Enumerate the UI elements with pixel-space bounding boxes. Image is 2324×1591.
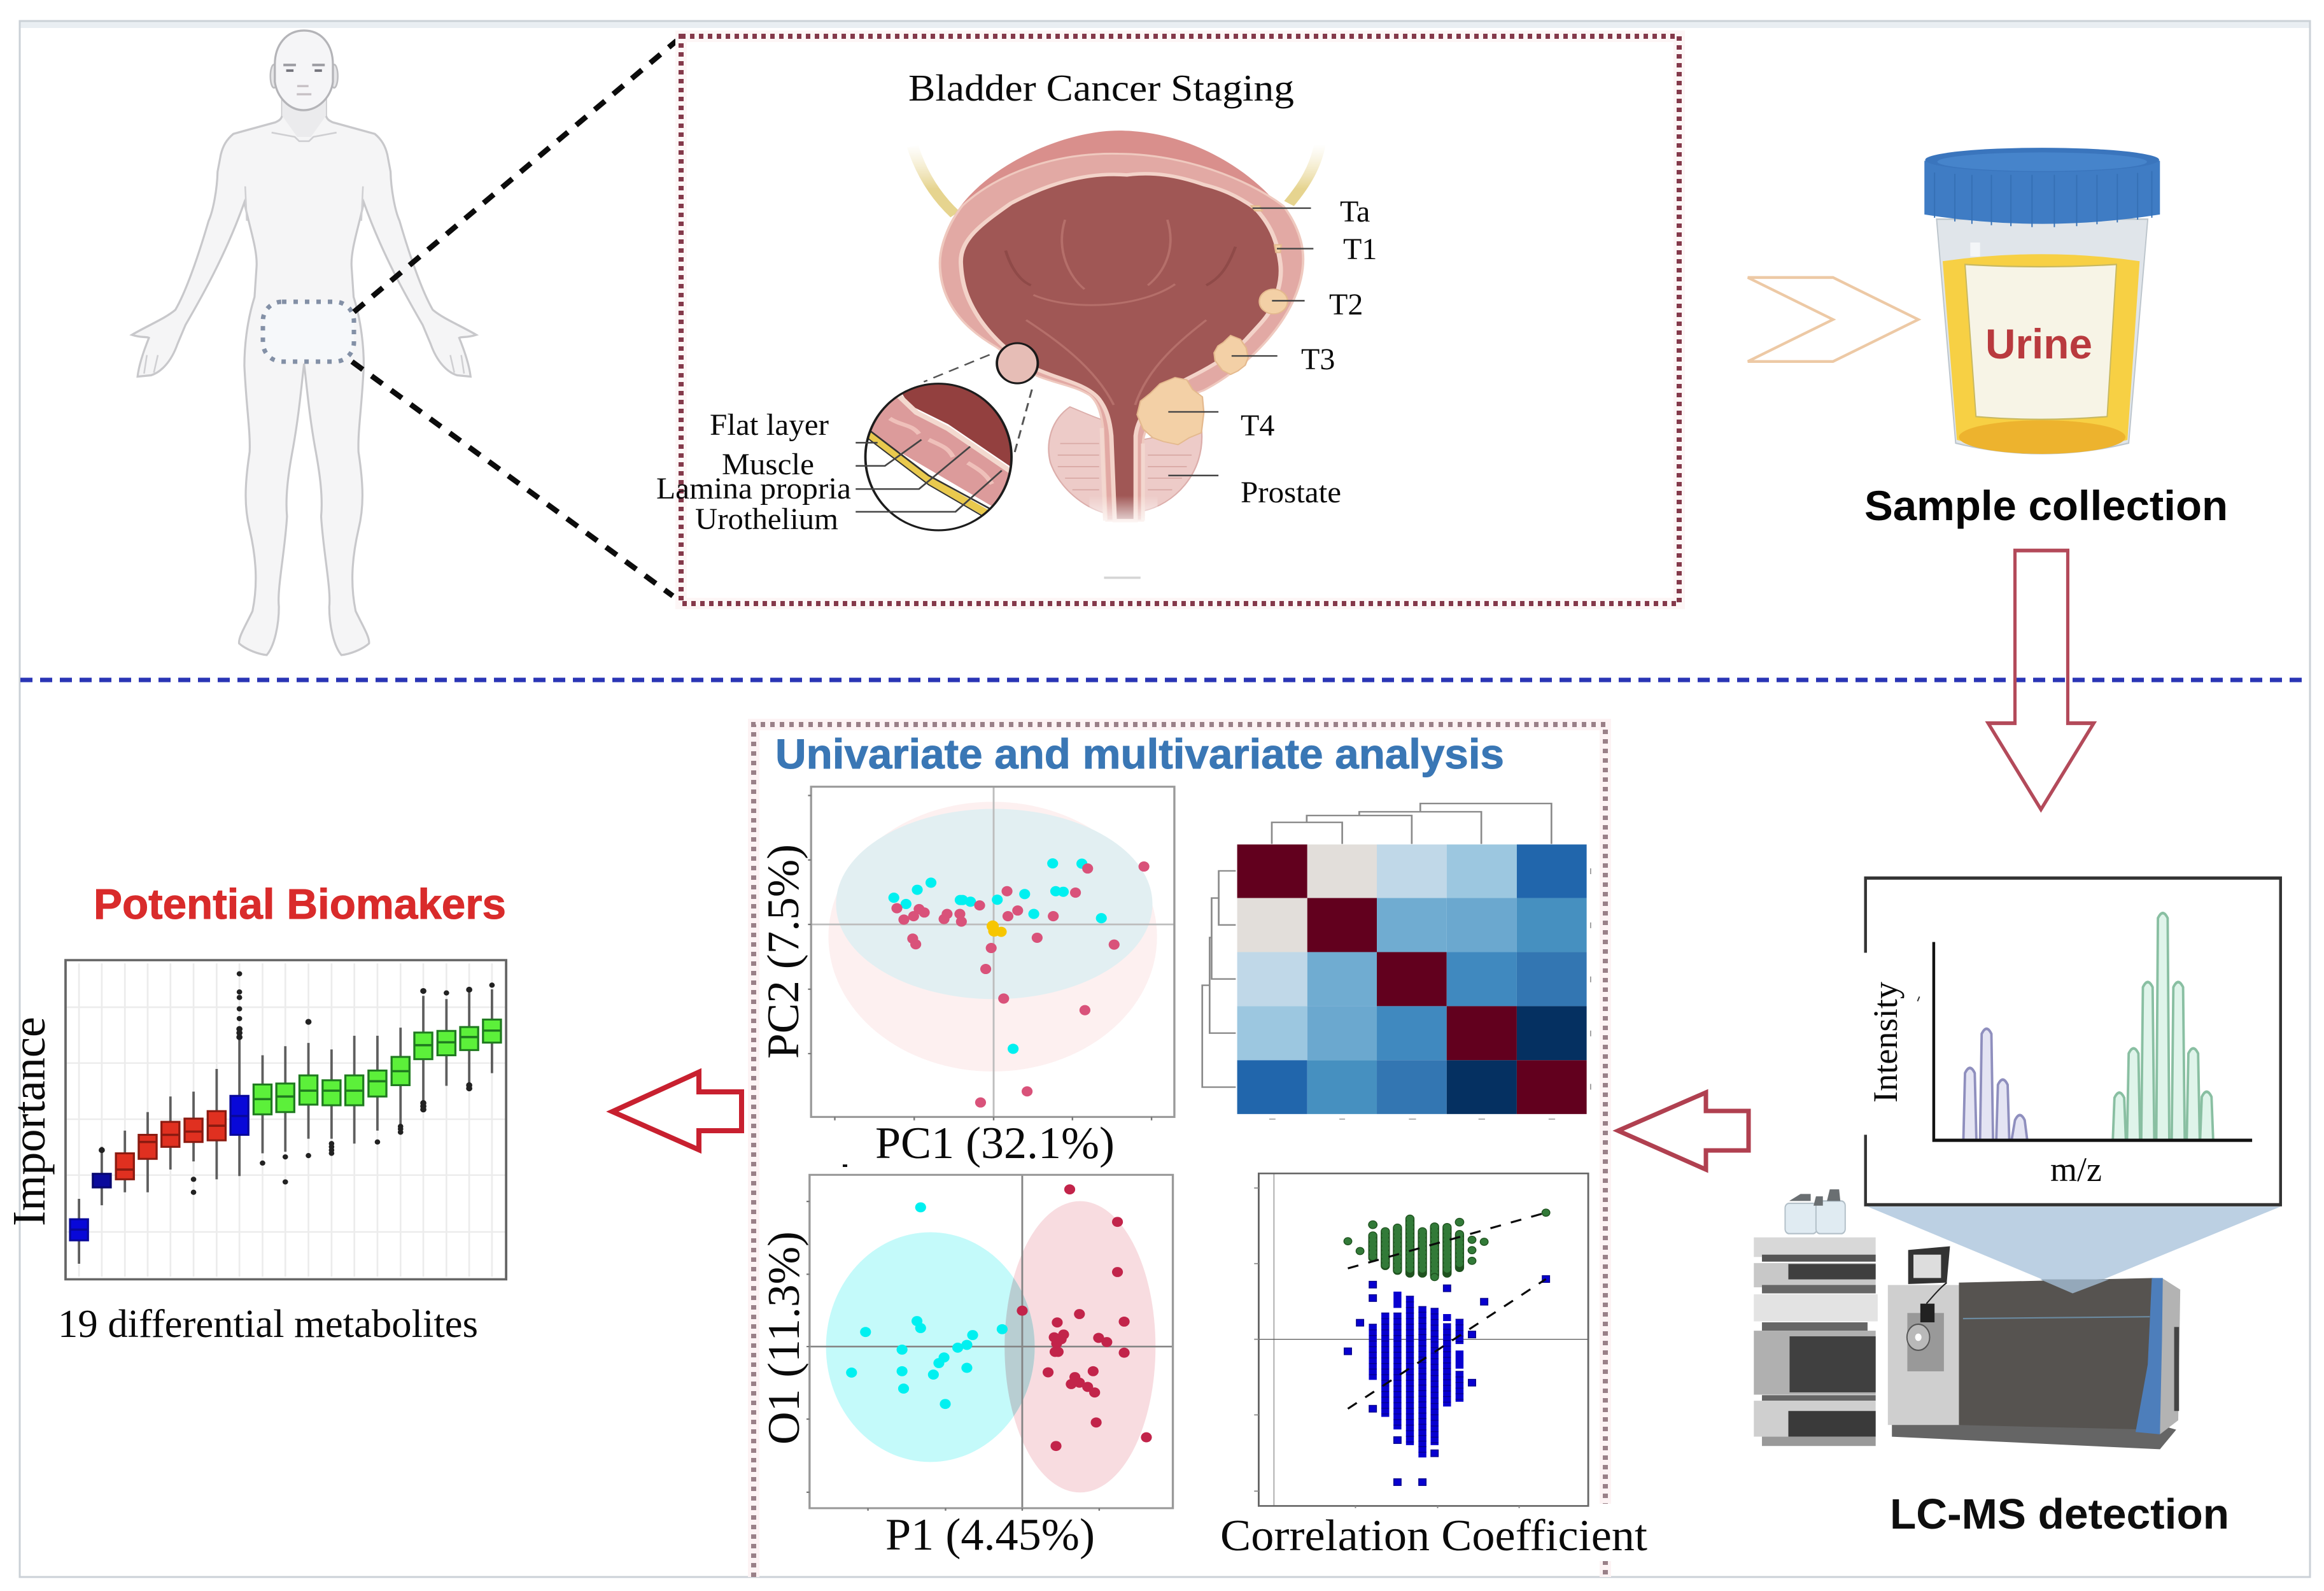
labels: stages: T4 bbox=[1241, 409, 1274, 442]
callout: dotted pelvis region bbox=[263, 302, 354, 362]
arrow: orange chevron to urine cup bbox=[1748, 278, 1919, 362]
chart: OPLS-DA score plot bbox=[806, 1175, 1173, 1511]
LC stack bbox=[1754, 1189, 1878, 1446]
blue metabolite series bbox=[1344, 1276, 1549, 1485]
labels: stages: Muscle bbox=[722, 448, 814, 481]
arrow: red left from LC-MS bbox=[1618, 1092, 1749, 1170]
illustration: bladder anatomy bbox=[856, 131, 1320, 577]
panel: bladder cancer staging bbox=[656, 36, 1679, 604]
labels: stages: Prostate bbox=[1241, 476, 1341, 509]
callout: black dashed zoom lines bbox=[352, 41, 677, 596]
label: intensity axis: Intensity bbox=[1866, 982, 1905, 1103]
heading: analysis: Univariate and multivariate analysis bbox=[775, 730, 1504, 777]
heading: bladder cancer staging: Bladder Cancer Staging bbox=[908, 67, 1294, 109]
heading: sample collection: Sample collection bbox=[1864, 482, 2228, 529]
axis label: O1: O1 (11.3%) bbox=[759, 1231, 809, 1445]
chart: importance box plot bbox=[66, 960, 506, 1279]
inset: wall layers magnifier bbox=[856, 343, 1038, 530]
green metabolite series bbox=[1344, 1209, 1550, 1281]
leader lines bbox=[1168, 208, 1313, 476]
labels: stages: Flat layer bbox=[710, 408, 829, 442]
chart: mass spectrum bbox=[1866, 878, 2281, 1292]
labels: stages: Ta bbox=[1340, 195, 1370, 229]
tumours T2 to T4 bbox=[1137, 206, 1288, 444]
label: m/z axis: m/z bbox=[2050, 1150, 2102, 1189]
panel: potential biomarkers bbox=[3, 880, 506, 1346]
axis label: PC2: PC2 (7.5%) bbox=[759, 844, 808, 1059]
axis label: correlation coefficient: Correlation Coefficient bbox=[1220, 1511, 1648, 1560]
icon: human body figure bbox=[132, 31, 476, 655]
chart: S-plot correlation bbox=[1254, 1173, 1588, 1508]
heading: potential biomakers: Potential Biomakers bbox=[94, 880, 506, 928]
mass spectrometer bbox=[1888, 1247, 2180, 1449]
heading: LC-MS detection: LC-MS detection bbox=[1890, 1490, 2229, 1538]
chart: PCA score plot bbox=[808, 787, 1174, 1121]
axis label: importance: Importance bbox=[3, 1017, 55, 1226]
labels: stages: T2 bbox=[1329, 288, 1363, 322]
icon: urine sample cup bbox=[1924, 148, 2160, 454]
labels: stages bbox=[656, 195, 1377, 536]
axis label: P1: P1 (4.45%) bbox=[885, 1510, 1095, 1560]
panel: LC-MS detection bbox=[1754, 878, 2281, 1538]
labels: stages: Urothelium bbox=[695, 502, 838, 536]
arrow: red left to biomarkers bbox=[612, 1072, 742, 1150]
arrow: red down bbox=[1988, 551, 2094, 809]
axis label: PC1: PC1 (32.1%) bbox=[875, 1119, 1115, 1168]
labels: stages: T1 bbox=[1343, 232, 1377, 266]
panel: univariate and multivariate analysis bbox=[754, 725, 1648, 1577]
chart: correlation heatmap bbox=[1202, 803, 1591, 1119]
caption: 19 differential metabolites: 19 differential metabolites bbox=[58, 1303, 478, 1346]
label: urine: Urine bbox=[1985, 320, 2092, 367]
prostate bbox=[1048, 407, 1202, 513]
labels: stages: T3 bbox=[1301, 343, 1335, 376]
labels: stages: Lamina propria bbox=[656, 472, 851, 506]
illustration: LC-MS instrument bbox=[1754, 1189, 2180, 1449]
